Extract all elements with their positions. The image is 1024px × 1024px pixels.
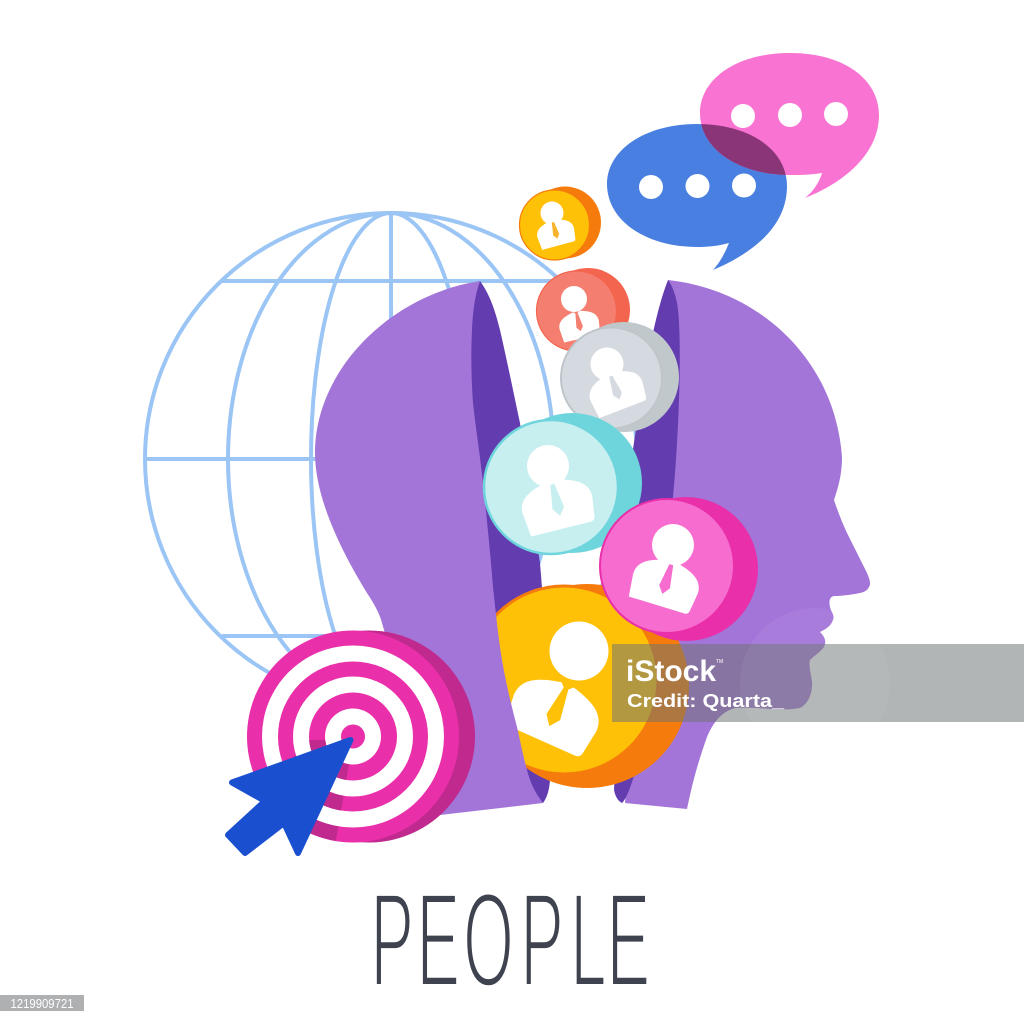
watermark logo text: iStock bbox=[626, 655, 716, 688]
head: left slit (dark inner side) bbox=[450, 281, 550, 803]
avatar token: large yellow bbox=[470, 584, 689, 788]
icon: target bbox=[247, 630, 475, 842]
icon: cursor arrow bbox=[228, 740, 350, 853]
head: right half bbox=[614, 280, 870, 809]
speech bubble dots bbox=[639, 102, 848, 199]
avatar token: pink bbox=[600, 497, 758, 641]
watermark trademark: TM bbox=[716, 659, 723, 665]
arrow shadow on target rings bbox=[295, 740, 349, 841]
avatar token: gray bbox=[561, 322, 679, 432]
head: left half bbox=[315, 281, 543, 815]
speech bubble: blue bbox=[607, 124, 787, 270]
watermark band bbox=[612, 608, 1024, 758]
image id tag: 1219909721 bbox=[10, 997, 74, 1011]
icon: wireframe globe bbox=[145, 213, 637, 705]
speech bubble overlap bbox=[701, 124, 786, 175]
avatar token: red bbox=[536, 268, 630, 352]
avatar token: teal bbox=[484, 413, 642, 554]
title: PEOPLE bbox=[371, 866, 650, 1015]
watermark credit text: Credit: Quarta_ bbox=[627, 691, 785, 711]
speech bubble: pink bbox=[700, 53, 879, 198]
avatar token: small yellow bbox=[520, 186, 601, 260]
